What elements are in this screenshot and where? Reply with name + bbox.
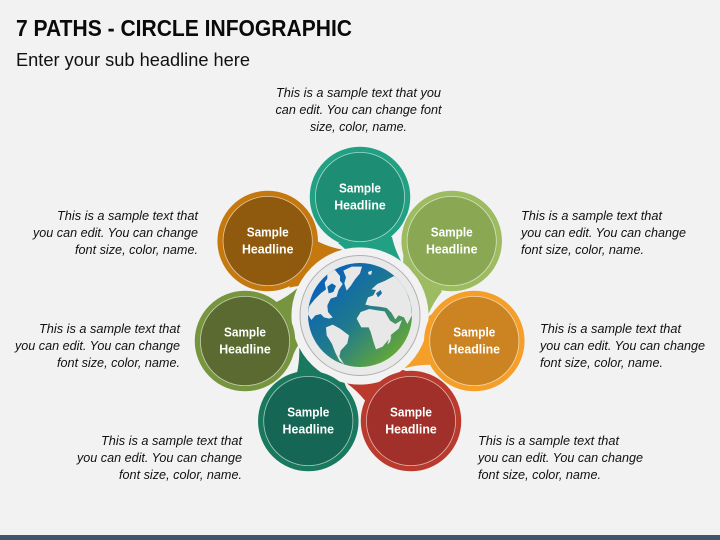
path node: light green: Sample <box>431 224 473 240</box>
path node: olive: Headline <box>219 342 271 356</box>
text block: top: can edit. You can change font <box>276 103 442 117</box>
path node: teal top: Headline <box>334 198 386 212</box>
text block: middle left <box>14 322 180 370</box>
text block: upper left: This is a sample text that <box>57 209 198 223</box>
path node: olive <box>194 288 311 392</box>
text block: lower left: This is a sample text that <box>101 434 242 448</box>
path node: dark teal: Headline <box>283 422 334 436</box>
text block: lower left: font size, color, name. <box>119 468 242 482</box>
path node: red: Sample <box>390 404 432 420</box>
text block: lower right: This is a sample text that <box>478 434 619 448</box>
path node: brown: Headline <box>242 242 293 256</box>
text block: middle left: This is a sample text that <box>39 322 180 336</box>
path node: olive: Sample <box>224 324 266 340</box>
islands <box>368 271 372 275</box>
path node: brown <box>217 190 343 299</box>
path node: teal top: Sample <box>339 180 381 196</box>
text block: middle right <box>539 322 705 370</box>
hudson bay <box>327 283 336 293</box>
text block: upper left: font size, color, name. <box>75 243 198 257</box>
path node: orange: Sample <box>453 324 495 340</box>
text block: middle left: you can edit. You can change <box>14 339 180 353</box>
eurasia <box>365 276 412 324</box>
path node: light green: Headline <box>426 242 477 256</box>
text block: top: This is a sample text that you <box>276 86 441 100</box>
path node: orange <box>404 290 525 392</box>
text block: upper right <box>520 209 686 257</box>
path node: dark teal: Sample <box>287 404 329 420</box>
title: 7 PATHS - CIRCLE INFOGRAPHIC <box>16 15 352 41</box>
path node: dark teal <box>257 348 359 472</box>
path node: red <box>347 356 462 472</box>
africa <box>357 309 402 349</box>
path node: light green <box>389 190 503 314</box>
text block: lower right: font size, color, name. <box>478 468 601 482</box>
text block: middle right: you can edit. You can change <box>539 339 705 353</box>
path node: teal top <box>309 146 411 261</box>
text block: middle right: font size, color, name. <box>540 356 663 370</box>
north america <box>308 270 343 320</box>
text block: upper right: This is a sample text that <box>521 209 662 223</box>
text block: middle left: font size, color, name. <box>57 356 180 370</box>
text block: upper left <box>32 209 198 257</box>
text block: upper right: you can edit. You can change <box>520 226 686 240</box>
text block: upper left: you can edit. You can change <box>32 226 198 240</box>
text block: upper right: font size, color, name. <box>521 243 644 257</box>
madagascar <box>387 336 391 345</box>
text block: lower left <box>76 434 242 482</box>
subtitle: Enter your sub headline here <box>16 49 250 70</box>
text block: lower right <box>477 434 643 482</box>
path node: brown: Sample <box>247 224 289 240</box>
text block: lower right: you can edit. You can change <box>477 451 643 465</box>
text block: top: size, color, name. <box>310 120 407 134</box>
baltic <box>376 290 382 297</box>
text block: top <box>276 86 442 134</box>
greenland <box>343 267 362 291</box>
path node: orange: Headline <box>449 342 500 356</box>
south america <box>326 325 349 365</box>
path node: red: Headline <box>385 422 437 436</box>
center globe <box>300 255 420 376</box>
text block: middle right: This is a sample text that <box>540 322 681 336</box>
text block: lower left: you can edit. You can change <box>76 451 242 465</box>
footer bar <box>0 535 720 540</box>
